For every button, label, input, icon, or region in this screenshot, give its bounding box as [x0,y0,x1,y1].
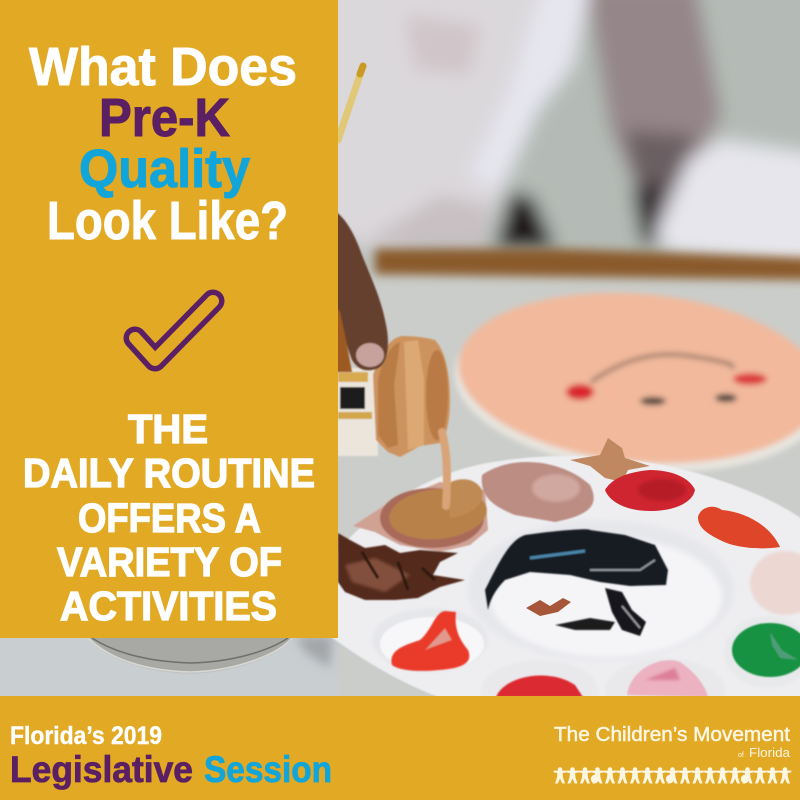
brown swirl paint [338,533,465,600]
statement text: DAILY ROUTINE [23,450,315,496]
red bottom paint [496,676,583,697]
title: Look Like? [47,191,288,251]
paintbrush handle [338,66,363,140]
blurred table edge [375,249,800,280]
footer heading: Florida's 2019 Legislative Session: Florida’s 2019 [10,722,162,750]
hand holding bottle [338,212,389,373]
skin tone well [353,479,489,552]
footer heading: Florida's 2019 Legislative Session: Session [204,749,332,790]
dusty pink paint [482,462,594,522]
logo: The Children's Movement of Florida [554,724,791,784]
statement text: THE [128,406,208,452]
paper plate with painted face [453,290,800,472]
small brown paint [526,598,571,616]
title: Quality [79,139,250,199]
orange red paint [698,507,780,548]
panel: gold title panel [0,0,338,638]
orange red left paint [391,611,469,671]
bottle label [338,368,379,456]
icon: check mark [135,301,213,360]
peach paint flake [570,438,650,482]
statement text [23,406,315,629]
paint palette [330,438,800,722]
icon: paper-doll chain of children [554,767,791,784]
title: Pre-K [99,88,230,148]
blurred background: child and sweater [310,0,800,270]
black paint [485,529,668,636]
title: What Does [29,37,297,97]
logo: The Children's Movement of Florida: of [738,752,744,759]
footer heading: Florida's 2019 Legislative Session: Legislative [10,749,193,790]
paint stream [442,432,447,506]
panel: footer band [0,696,800,800]
paint bottle [330,336,450,506]
bottle neck [373,336,450,457]
footer heading: Florida's 2019 Legislative Session [10,722,332,790]
pink paint [627,660,708,697]
red paint [605,470,695,511]
title [29,37,297,251]
logo: The Children's Movement of Florida: The Children’s Movement [554,724,790,746]
statement text: OFFERS A [78,495,261,541]
logo: The Children's Movement of Florida: Florida [749,745,791,760]
statement text: ACTIVITIES [60,583,277,629]
palette wells [468,520,734,660]
statement text: VARIETY OF [57,539,282,585]
pale pink paint [750,551,800,615]
green paint [732,623,800,677]
metal tin [88,638,336,674]
